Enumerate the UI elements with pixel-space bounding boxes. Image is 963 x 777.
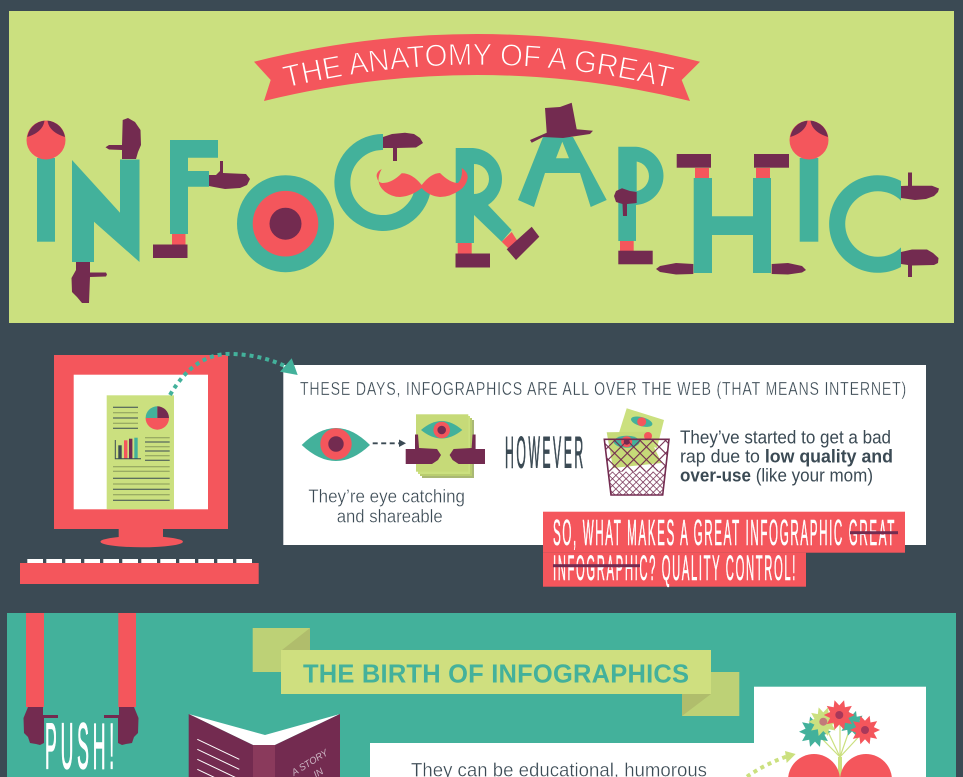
heart xyxy=(788,754,892,777)
keyboard xyxy=(20,561,259,584)
pie chart xyxy=(146,406,169,430)
caption: eye catching: They’re eye catching xyxy=(308,486,465,507)
monitor stand xyxy=(100,529,183,547)
letter F with hand and foot xyxy=(153,140,250,258)
text box xyxy=(370,743,754,777)
panel: title header xyxy=(9,11,954,323)
panel: birth of infographics xyxy=(7,613,956,777)
arrow: dotted text to card xyxy=(747,751,796,777)
second letter I with head xyxy=(790,120,828,242)
caption: eye catching: and shareable xyxy=(337,506,443,527)
text: bad rap xyxy=(680,427,893,486)
header background xyxy=(9,11,954,323)
banner line two xyxy=(543,549,806,588)
panel: monitor illustration xyxy=(20,355,259,584)
monitor frame xyxy=(54,355,228,529)
arrow: eye to stack xyxy=(373,440,406,447)
icon: eye xyxy=(302,428,370,461)
title ribbon: the birth of infographics: THE BIRTH OF INFOGRAPHICS xyxy=(303,661,689,689)
text: bad rap: over-use (like your mom) xyxy=(680,466,873,486)
moustache xyxy=(377,168,468,197)
letter N with hands xyxy=(72,118,141,303)
letter I with head xyxy=(26,120,66,242)
letter R with feet xyxy=(456,148,539,268)
letter C with hands xyxy=(829,172,939,277)
letter H with feet and hands xyxy=(656,154,806,274)
icon: open book xyxy=(189,714,340,777)
white box xyxy=(283,365,926,545)
title ribbon: THE ANATOMY OF A GREAT xyxy=(282,44,674,86)
icon: shared paper stack with hands xyxy=(406,414,485,478)
title ribbon: the birth of infographics xyxy=(253,628,739,716)
arrow: dotted monitor to box xyxy=(170,354,298,395)
letter A with hat xyxy=(518,103,607,207)
panel: intro white box xyxy=(283,365,926,545)
panel: intro white box: HOWEVER xyxy=(505,428,586,477)
text: bad rap: rap due to low quality and xyxy=(680,447,893,467)
arms and hands xyxy=(24,613,138,745)
heart bouquet card xyxy=(754,687,926,777)
teal background xyxy=(7,613,956,777)
text: bad rap: They’ve started to get a bad xyxy=(680,427,891,447)
icon: waste basket with papers xyxy=(604,408,670,495)
letter O as eye xyxy=(237,175,334,272)
bar chart xyxy=(115,438,141,459)
monitor screen xyxy=(74,375,208,509)
mini infographic document xyxy=(107,395,174,509)
letter G with hand xyxy=(342,133,423,223)
letter P with hand and foot xyxy=(614,147,663,264)
callout: red banner xyxy=(543,512,905,588)
flowers xyxy=(799,700,880,747)
